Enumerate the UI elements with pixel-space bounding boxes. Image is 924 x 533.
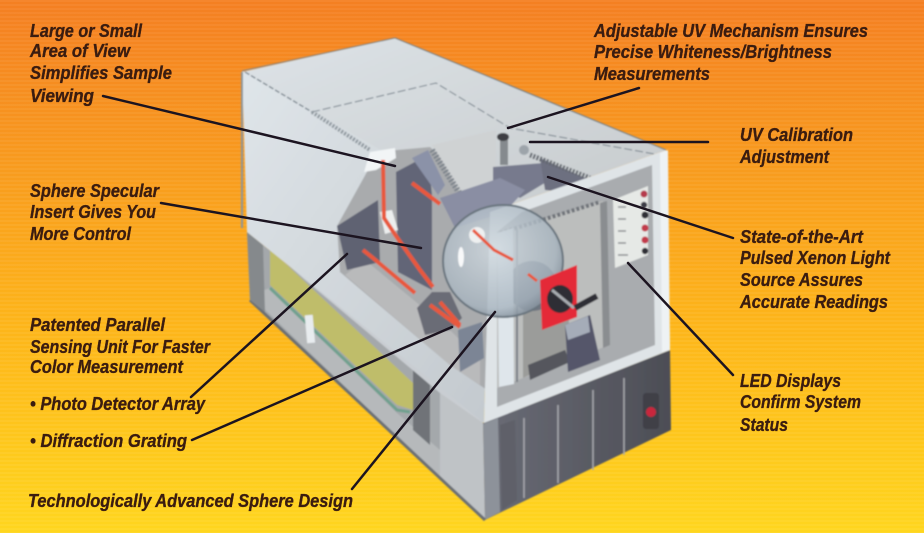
label: pulsed xenon light source bbox=[739, 226, 891, 312]
label: LED displays bbox=[740, 370, 861, 435]
label: sphere design: Technologically Advanced Sphere Design bbox=[28, 490, 353, 511]
instrument base bbox=[247, 232, 671, 520]
label: sphere specular insert bbox=[30, 180, 161, 244]
leader lines bbox=[103, 88, 733, 489]
label: pulsed xenon light source: Pulsed Xenon Light bbox=[740, 247, 891, 268]
red sensor plate with lens bbox=[540, 265, 597, 330]
label: patented parallel sensing unit: Patented Parallel bbox=[30, 314, 166, 335]
label: UV calibration adjustment: UV Calibration bbox=[740, 124, 853, 145]
label: pulsed xenon light source: State-of-the-Art bbox=[740, 226, 864, 247]
label: adjustable UV mechanism bbox=[593, 20, 868, 84]
label: adjustable UV mechanism: Adjustable UV Mechanism Ensures bbox=[593, 20, 868, 41]
illustration: spectrophotometer cutaway bbox=[242, 38, 671, 520]
label: large or small area of view bbox=[29, 20, 172, 106]
label: sphere specular insert: Sphere Specular bbox=[30, 180, 161, 201]
label: LED displays: Status bbox=[740, 414, 788, 435]
detector module bbox=[497, 228, 600, 387]
label: photo detector array: • Photo Detector Array bbox=[30, 393, 207, 414]
label: LED displays: LED Displays bbox=[740, 370, 841, 391]
label: large or small area of view: Simplifies Sample bbox=[30, 62, 172, 83]
left interior cutaway bbox=[337, 130, 496, 392]
label: sphere specular insert: More Control bbox=[30, 223, 132, 244]
label: large or small area of view: Large or Small bbox=[30, 20, 143, 41]
label: patented parallel sensing unit bbox=[30, 314, 212, 377]
front foot connector bbox=[305, 315, 315, 343]
label: patented parallel sensing unit: Color Measurement bbox=[30, 356, 184, 377]
red light beams bbox=[363, 160, 460, 327]
integrating sphere bbox=[443, 205, 563, 317]
light frame strip above base bbox=[247, 228, 483, 423]
label: large or small area of view: Viewing bbox=[30, 85, 94, 106]
green display edge bbox=[270, 288, 410, 412]
label: adjustable UV mechanism: Precise Whiteness/Brightness bbox=[594, 41, 832, 62]
front interior panel bbox=[484, 150, 670, 423]
cover edges and hatched seams bbox=[242, 38, 666, 228]
label: sphere specular insert: Insert Gives You bbox=[30, 201, 156, 222]
power switch bbox=[643, 393, 659, 429]
label: LED displays: Confirm System bbox=[740, 391, 861, 412]
label: pulsed xenon light source: Source Assures bbox=[740, 269, 863, 290]
LED status panel bbox=[613, 186, 648, 268]
label: diffraction grating: • Diffraction Grating bbox=[30, 430, 187, 451]
instrument cover: top face bbox=[242, 38, 666, 212]
label: UV calibration adjustment bbox=[739, 124, 853, 167]
label: large or small area of view: Area of View bbox=[29, 40, 131, 61]
label: pulsed xenon light source: Accurate Readings bbox=[739, 291, 888, 312]
label: patented parallel sensing unit: Sensing Unit For Faster bbox=[30, 336, 212, 357]
cover: left face bbox=[242, 71, 490, 423]
label: UV calibration adjustment: Adjustment bbox=[739, 146, 830, 167]
yellow display panel bbox=[270, 249, 413, 410]
xenon lamp housing and UV calibration screw bbox=[440, 133, 590, 228]
label: adjustable UV mechanism: Measurements bbox=[594, 63, 710, 84]
